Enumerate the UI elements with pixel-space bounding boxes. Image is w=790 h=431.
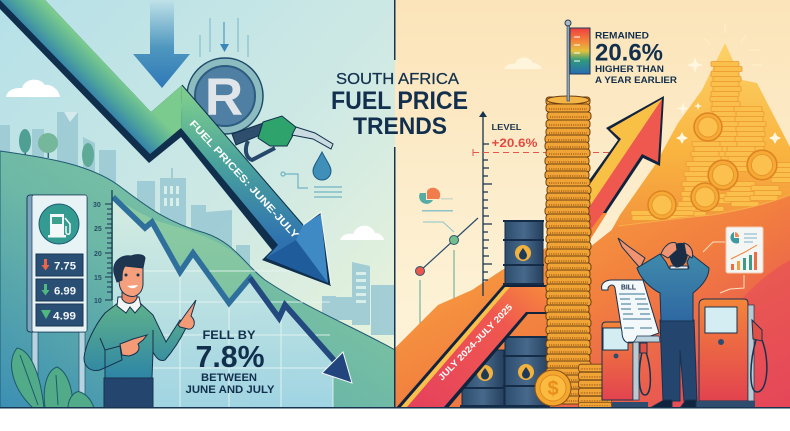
axis and level: +20.6%	[492, 138, 538, 150]
price rows: 7.75	[54, 260, 76, 272]
head	[122, 285, 137, 303]
arrow label: FUEL PRICES: JUNE-JULY	[187, 119, 301, 241]
red hill	[395, 195, 790, 408]
oil barrels	[460, 221, 550, 408]
axis and level: LEVEL	[492, 122, 522, 132]
icon: rand coin	[187, 58, 263, 134]
axis: 25	[94, 226, 102, 233]
chart card	[703, 227, 763, 293]
title: TRENDS	[353, 113, 447, 140]
trees	[19, 129, 94, 167]
green hill	[0, 151, 395, 408]
big rising arrow head	[585, 96, 664, 246]
gold mountain	[606, 43, 790, 240]
shirt collar	[117, 297, 141, 313]
panel: right background	[395, 0, 790, 408]
green arrow: fuel prices	[0, 0, 331, 286]
hands	[120, 335, 147, 356]
leaves	[12, 348, 94, 408]
title	[331, 71, 468, 140]
chart area	[113, 196, 250, 408]
person pointing	[84, 255, 196, 408]
axis: 15	[94, 275, 102, 282]
flag	[565, 20, 590, 101]
fell by text	[186, 328, 275, 396]
remained text: A YEAR EARLIER	[595, 75, 677, 86]
remained text: REMAINED	[595, 30, 650, 40]
chart line arrow	[113, 197, 352, 383]
axis: 30	[93, 202, 101, 209]
dollar coin	[535, 370, 571, 406]
panel: falling prices	[0, 0, 395, 408]
sparkles	[676, 57, 781, 144]
city skyline	[0, 112, 395, 335]
white footer	[0, 409, 790, 431]
axis	[93, 190, 112, 305]
icon: fuel drop	[313, 152, 331, 180]
fell by text: FELL BY	[202, 328, 256, 342]
icon: fuel nozzle	[232, 116, 333, 160]
remained text	[595, 30, 677, 86]
icon: cloud left	[6, 80, 60, 97]
small data glyph	[281, 172, 342, 197]
remained text: HIGHER THAN	[595, 64, 664, 75]
worried man	[618, 238, 709, 408]
axis and level	[473, 111, 610, 296]
fell by text: BETWEEN	[201, 372, 257, 384]
axis: 20	[94, 251, 102, 258]
cloud	[504, 58, 542, 69]
icon: pump badge	[39, 204, 79, 244]
coin stack	[545, 96, 591, 404]
price rows: 6.99	[54, 286, 76, 298]
axis: 10	[94, 298, 102, 305]
bill	[602, 280, 660, 343]
coin piles	[631, 62, 790, 220]
centre divider bottom	[394, 147, 396, 408]
price rows	[36, 254, 83, 326]
icon: rand coin: R	[205, 68, 243, 127]
bill: BILL	[621, 284, 637, 292]
title: SOUTH AFRICA	[336, 71, 459, 88]
fell by text: JUNE AND JULY	[186, 384, 275, 396]
icon: down arrow	[133, 0, 190, 88]
dollar coin: $	[547, 378, 559, 400]
ribbon arrow base	[396, 285, 547, 408]
panel: left background	[0, 0, 395, 408]
remained text: 20.6%	[595, 40, 663, 66]
price rows: 4.99	[53, 310, 76, 322]
small coin stack	[578, 364, 612, 407]
title: FUEL PRICE	[331, 87, 468, 115]
mini chart on wall	[415, 188, 478, 393]
small falling lines	[200, 18, 248, 57]
cloud right	[340, 226, 384, 240]
fell by text: 7.8%	[196, 339, 264, 374]
fuel price sign	[27, 195, 87, 408]
bottom edge	[0, 407, 790, 408]
petrol pump back	[602, 322, 650, 408]
ribbon label: JULY 2024-JULY 2025	[436, 302, 514, 382]
centre divider top	[394, 0, 396, 60]
pump front	[695, 299, 767, 408]
